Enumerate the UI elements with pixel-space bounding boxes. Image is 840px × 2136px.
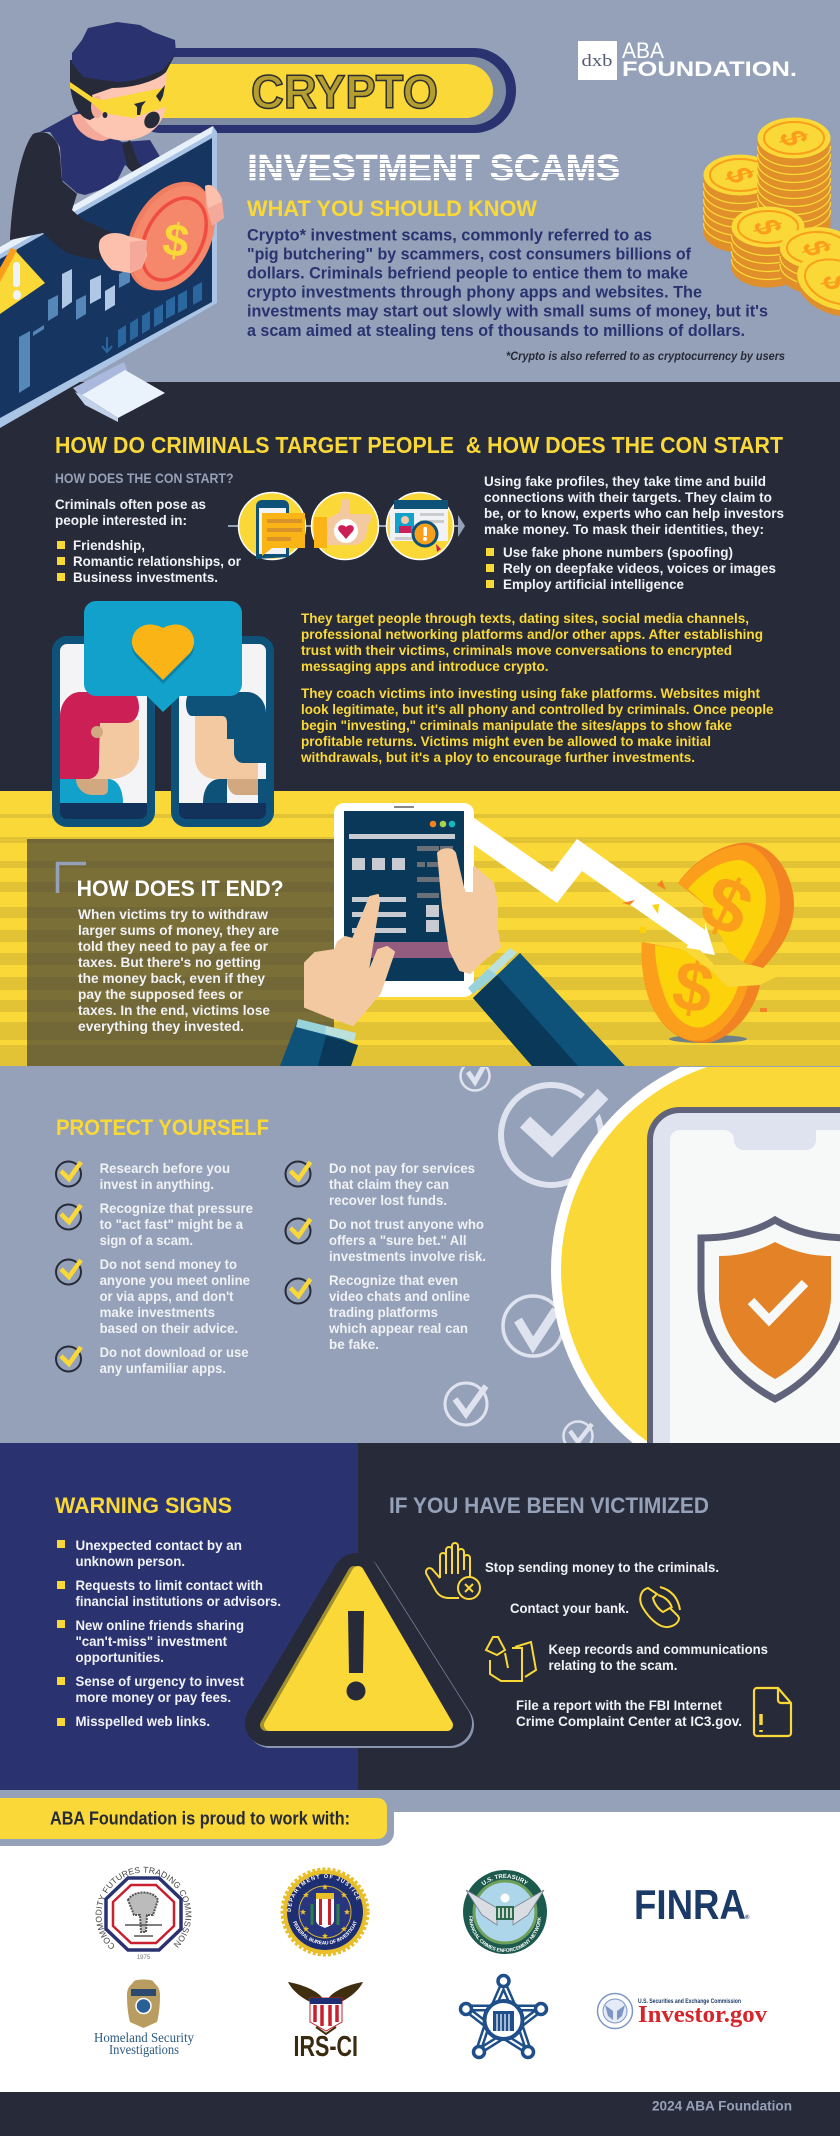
- check item five: [286, 1160, 475, 1208]
- check item seven: [286, 1272, 470, 1352]
- check item six: [286, 1216, 486, 1264]
- check item one: Research before you: [100, 1160, 230, 1176]
- logo: FinCEN seal: [463, 1870, 547, 1954]
- hacker head: [70, 22, 176, 141]
- logo: Homeland Security Investigations: [94, 1980, 194, 2058]
- text: using fake profiles: Using fake profiles, they take time and build: [484, 473, 766, 489]
- check item seven: which appear real can: [328, 1320, 468, 1336]
- logo: Homeland Security Investigations: Homeland Security: [94, 2031, 194, 2046]
- title pill: Crypto: [120, 48, 516, 133]
- text: when victims try: [78, 906, 279, 1034]
- step: contact your bank: Contact your bank.: [510, 1600, 629, 1616]
- text: they target people: trust with their victims, criminals move conversations to encrypted: [301, 642, 732, 658]
- check item three: make investments: [100, 1304, 215, 1320]
- check item three: anyone you meet online: [100, 1272, 250, 1288]
- panel: how does it end: [27, 839, 334, 1066]
- intro text: dollars. Criminals befriend people to entice them to make: [247, 264, 688, 282]
- logo: FinCEN seal: U.S. TREASURY: [481, 1874, 528, 1885]
- checklist column two: [286, 1160, 486, 1352]
- stack right: $: [793, 236, 840, 260]
- panel: protect yourself background: [0, 1066, 840, 1443]
- text: they coach victims: [300, 685, 774, 765]
- text: they coach victims: look legitimate, but it's all phony and controlled by criminals. Once people: [301, 701, 774, 717]
- logo: FINRA: ®: [745, 1914, 750, 1921]
- check item four: [56, 1344, 249, 1376]
- single coin: [790, 243, 840, 327]
- banner: ABA Foundation is proud to work with: [0, 1798, 394, 1846]
- text: criminals often pose as: Friendship,: [73, 537, 145, 553]
- check item six: offers a "sure bet." All: [329, 1232, 466, 1248]
- text: using fake profiles: Rely on deepfake videos, voices or images: [503, 560, 776, 576]
- warning signs list: unknown person.: [76, 1553, 185, 1569]
- icon: documents and pin: [486, 1637, 536, 1681]
- stack front: $: [744, 215, 792, 239]
- logo: Secret Service star: [460, 1976, 546, 2058]
- text: when victims try: everything they invested.: [78, 1018, 244, 1034]
- step: keep records: relating to the scam.: [548, 1657, 678, 1673]
- panel: warning signs background: [0, 1443, 358, 1790]
- phone right: [171, 636, 274, 827]
- text: when victims try: taxes. In the end, victims lose: [78, 1002, 270, 1018]
- intro text: a scam aimed at stealing tens of thousands to millions of dollars.: [247, 322, 745, 340]
- check item three: or via apps, and don't: [100, 1288, 234, 1304]
- icon: phone handset: [640, 1587, 680, 1627]
- icon: profile and magnifier: [386, 492, 454, 560]
- icon chain: phone, thumbs up, profile search: [228, 492, 465, 560]
- step: keep records: [486, 1637, 768, 1681]
- logo: ABA Foundation: FOUNDATION.: [622, 58, 797, 81]
- crypto coin held by hacker: [129, 182, 215, 290]
- step: stop sending money: [426, 1543, 719, 1599]
- checklist column one: [56, 1160, 253, 1376]
- icon: raised hand: [426, 1543, 480, 1599]
- text: when victims try: told they need to pay a fee or: [78, 938, 269, 954]
- text: criminals often pose as: Criminals often pose as: [55, 496, 206, 512]
- logo: CFTC: COMMODITY FUTURES TRADING COMMISSION: [96, 1866, 192, 1949]
- text: they coach victims: profitable returns. Victims might even be allowed to make initial: [301, 733, 711, 749]
- warning signs list: Sense of urgency to invest: [76, 1673, 244, 1689]
- right hand and sleeve: [438, 849, 625, 1066]
- text: they target people: professional networking platforms and/or other apps. After establishing: [301, 626, 763, 642]
- broken coin: $: [667, 945, 719, 1029]
- warning signs list: Requests to limit contact with: [76, 1577, 263, 1593]
- hacker torso: [40, 111, 160, 195]
- warning signs list: more money or pay fees.: [76, 1689, 231, 1705]
- check item three: [56, 1256, 250, 1336]
- footer: [0, 2092, 840, 2136]
- check item one: [56, 1160, 230, 1192]
- logo: IRS-CI: [288, 1982, 363, 2063]
- warning signs list: Misspelled web links.: [76, 1713, 210, 1729]
- panel: if you have been victimized background: [358, 1443, 840, 1790]
- step: keep records: Keep records and communications: [548, 1641, 768, 1657]
- check item four: any unfamiliar apps.: [100, 1360, 226, 1376]
- step: contact your bank: [510, 1587, 680, 1627]
- text: using fake profiles: connections with their targets. They claim to: [484, 489, 772, 505]
- check item four: Do not download or use: [100, 1344, 249, 1360]
- step: file a report: Crime Complaint Center at IC3.gov.: [516, 1713, 742, 1729]
- panel: yellow striped band: [0, 791, 840, 1066]
- heading: protect yourself: PROTECT YOURSELF: [56, 1115, 269, 1140]
- warning signs list: [57, 1537, 281, 1729]
- stack back right: $: [770, 126, 818, 150]
- heading: how does it end: HOW DOES IT END?: [77, 876, 284, 901]
- panel: header background: [0, 0, 840, 382]
- text: when victims try: the money back, even if they: [78, 970, 265, 986]
- intro text: Crypto* investment scams, commonly referred to as: [247, 226, 652, 244]
- check item seven: be fake.: [329, 1336, 379, 1352]
- check item two: sign of a scam.: [100, 1232, 193, 1248]
- crypto coin held by hacker: $: [160, 212, 192, 268]
- heading: Investment Scams: INVESTMENT SCAMS: [248, 147, 620, 188]
- monitor: [0, 126, 217, 428]
- logo: FBI seal: FEDERAL BUREAU OF INVESTIGATION: [293, 1920, 357, 1944]
- check item three: Do not send money to: [100, 1256, 237, 1272]
- stack right: [780, 227, 840, 294]
- text: criminals often pose as: people interested in:: [55, 512, 187, 528]
- warning signs list: "can't-miss" investment: [76, 1633, 227, 1649]
- text: when victims try: larger sums of money, they are: [78, 922, 279, 938]
- check item seven: video chats and online: [329, 1288, 470, 1304]
- text: criminals often pose as: Romantic relationships, or: [73, 553, 242, 569]
- logo: ABA Foundation: dxb: [582, 51, 612, 70]
- intro text: [247, 226, 768, 340]
- intro text: crypto investments through phony apps and websites. The: [247, 284, 702, 302]
- shield: [701, 1220, 840, 1399]
- broken coin: $: [689, 857, 765, 953]
- check item two: to "act fast" might be a: [100, 1216, 243, 1232]
- panel: partners white background: [0, 1812, 840, 2092]
- check item five: that claim they can: [329, 1176, 449, 1192]
- icon: file with alert: [754, 1688, 791, 1736]
- check item two: [56, 1200, 253, 1248]
- hacker arm: [10, 132, 113, 260]
- intro text: "pig butchering" by scammers, cost consumers billions of: [247, 246, 691, 264]
- decorative checkmarks: [445, 1062, 603, 1450]
- check item one: invest in anything.: [100, 1176, 214, 1192]
- check item five: Do not pay for services: [329, 1160, 475, 1176]
- illustration: couple on phones with heart: [52, 601, 274, 827]
- check item five: recover lost funds.: [329, 1192, 447, 1208]
- warning signs list: financial institutions or advisors.: [76, 1593, 281, 1609]
- check item six: Do not trust anyone who: [329, 1216, 484, 1232]
- logo: ABA Foundation: [578, 38, 797, 81]
- text: they target people: [301, 610, 763, 674]
- logo: Homeland Security Investigations: Investigations: [109, 2043, 179, 2058]
- left hand and sleeve: [280, 895, 394, 1066]
- logo: FBI seal: DEPARTMENT OF JUSTICE: [287, 1874, 360, 1912]
- text: they coach victims: They coach victims into investing using fake platforms. Websites might: [301, 685, 760, 701]
- warning signs list: Unexpected contact by an: [76, 1537, 242, 1553]
- speech bubble with heart: [84, 601, 242, 712]
- logo: Investor.gov: U.S. Securities and Exchange Commission: [638, 1999, 741, 2005]
- monitor stand: [73, 362, 165, 422]
- banner: ABA Foundation is proud to work with: ABA Foundation is proud to work with:: [50, 1808, 350, 1828]
- stack back left: [704, 154, 776, 252]
- arrow: [474, 818, 715, 955]
- stack back right: [758, 118, 830, 246]
- logo: ABA Foundation: ABA: [622, 38, 664, 63]
- check item two: Recognize that pressure: [100, 1200, 253, 1216]
- text: criminals often pose as: [55, 496, 242, 585]
- heading: if you have been victimized: IF YOU HAVE BEEN VICTIMIZED: [389, 1493, 709, 1518]
- text: using fake profiles: be, or to know, experts who can help investors: [484, 505, 784, 521]
- icon: phone chat: [238, 492, 306, 560]
- illustration: hacker at monitor: [0, 22, 232, 428]
- check item seven: Recognize that even: [329, 1272, 458, 1288]
- check item seven: trading platforms: [329, 1304, 438, 1320]
- illustration: gold coin stacks: [704, 118, 840, 327]
- panel: partners strip: [0, 1790, 840, 1812]
- phone: [647, 1107, 840, 1443]
- title pill: Crypto: CRYPTO: [251, 65, 438, 118]
- logo: Investor.gov: Investor.gov: [638, 2002, 767, 2028]
- logo: IRS-CI: IRS-CI: [294, 2031, 358, 2063]
- icon: large warning triangle: [266, 1572, 451, 1725]
- warning signs list: opportunities.: [76, 1649, 164, 1665]
- text: they coach victims: begin "investing," criminals manipulate the sites/apps to show fake: [301, 717, 732, 733]
- heading: What you should know: WHAT YOU SHOULD KNOW: [247, 196, 537, 221]
- subheading: how does the con start: HOW DOES THE CON START?: [55, 471, 234, 486]
- warning signs list: New online friends sharing: [76, 1617, 244, 1633]
- logo: Investor.gov: [598, 1994, 767, 2028]
- text: they target people: messaging apps and introduce crypto.: [301, 658, 548, 674]
- text: criminals often pose as: Business investments.: [73, 569, 218, 585]
- illustration: tablet, hands, falling arrow and broken coin: [280, 803, 794, 1066]
- logo: CFTC: 1975: [137, 1955, 151, 1961]
- text: they coach victims: withdrawals, but it's a ploy to encourage further investments.: [300, 749, 695, 765]
- text: when victims try: taxes. But there's no getting: [78, 954, 261, 970]
- intro text: investments may start out slowly with small sums of money, but it's: [247, 302, 768, 320]
- step: file a report: File a report with the FBI Internet: [516, 1697, 722, 1713]
- text: using fake profiles: Use fake phone numbers (spoofing): [503, 544, 733, 560]
- text: using fake profiles: make money. To mask their identities, they:: [484, 521, 764, 537]
- logo: FBI seal: [280, 1868, 370, 1956]
- tablet: [334, 803, 474, 997]
- text: they target people: They target people through texts, dating sites, social media channels,: [301, 610, 749, 626]
- icon: thumbs up heart: [312, 492, 378, 560]
- icon: warning triangle on monitor: [0, 248, 45, 314]
- broken coin: [622, 843, 794, 1043]
- stack front: [732, 206, 804, 288]
- footer: 2024 ABA Foundation: [652, 2098, 792, 2114]
- stack back left: $: [716, 163, 764, 187]
- logo: FINRA: FINRA: [634, 1881, 746, 1928]
- text: using fake profiles: Employ artificial intelligence: [503, 576, 684, 592]
- text: using fake profiles: [484, 473, 784, 592]
- text: when victims try: When victims try to withdraw: [78, 906, 268, 922]
- step: stop sending money: Stop sending money to the criminals.: [485, 1559, 719, 1575]
- heading: how do criminals target people: HOW DO CRIMINALS TARGET PEOPLE & HOW DOES THE CON START: [55, 432, 783, 458]
- step: file a report: [516, 1688, 791, 1736]
- phone left: [52, 636, 155, 827]
- hacker hands: [99, 185, 224, 273]
- check item three: based on their advice.: [100, 1320, 238, 1336]
- heading: warning signs: WARNING SIGNS: [55, 1493, 232, 1518]
- panel: dark target section background: [0, 382, 840, 791]
- illustration: phone with shield: [551, 1067, 840, 1443]
- logo: FinCEN seal: FINANCIAL CRIMES ENFORCEMENT NETWORK: [469, 1916, 541, 1952]
- check item six: investments involve risk.: [329, 1248, 486, 1264]
- footnote: *Crypto is also referred to as cryptocurrency by users: [506, 351, 785, 363]
- text: when victims try: pay the supposed fees or: [78, 986, 244, 1002]
